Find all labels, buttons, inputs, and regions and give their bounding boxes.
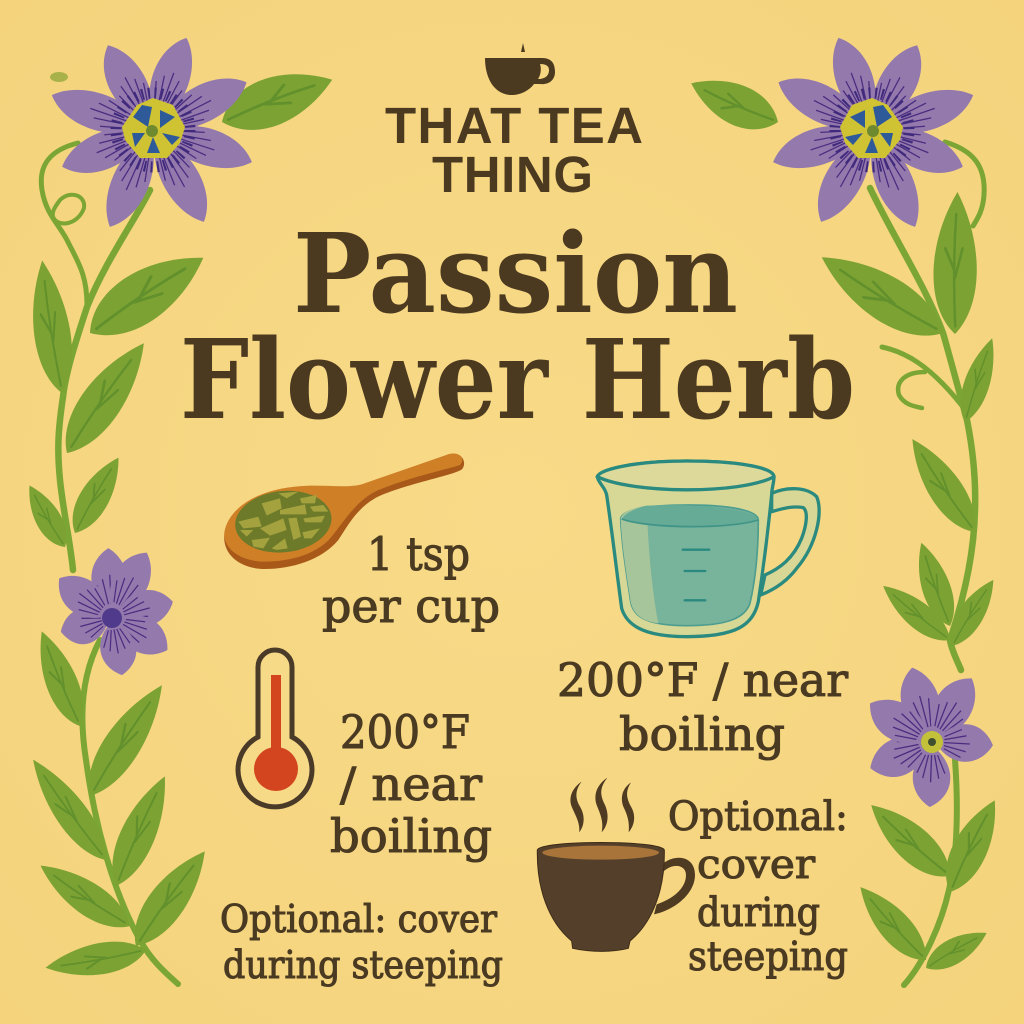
- text: optional right: cover: [697, 842, 816, 888]
- text: optional right: [668, 794, 848, 980]
- text: temperature: 200°F: [340, 705, 470, 759]
- brand name: [385, 97, 643, 203]
- left vine: [18, 56, 340, 984]
- text: optional right: Optional:: [668, 794, 848, 840]
- icon: spoon with herbs: [224, 454, 464, 569]
- text: optional right: during: [697, 890, 820, 936]
- left leaves: [18, 56, 340, 984]
- text: temperature: boiling: [330, 809, 492, 863]
- text: temperature: [330, 705, 492, 863]
- text: temperature: / near: [340, 757, 482, 811]
- text: amount: per cup: [322, 579, 500, 633]
- text: amount: 1 tsp: [367, 527, 470, 581]
- text: water temperature: [557, 653, 848, 761]
- lower left stem: [82, 640, 178, 984]
- text: optional left: Optional: cover: [220, 897, 498, 941]
- text: water temperature: boiling: [619, 707, 785, 761]
- flower: top right: [767, 31, 979, 235]
- icon: logo cup: [485, 43, 555, 95]
- text: optional left: [220, 897, 503, 987]
- text: amount: [322, 527, 500, 633]
- brand name: THING: [432, 146, 593, 203]
- brand name: THAT TEA: [385, 97, 643, 154]
- icon: steaming cup: [537, 778, 695, 951]
- right leaves: [683, 66, 1009, 978]
- small dot: [50, 72, 68, 82]
- flower: top left: [46, 31, 258, 235]
- text: optional right: steeping: [688, 934, 848, 980]
- text: optional left: during steeping: [223, 943, 503, 987]
- title: Flower Herb: [180, 315, 855, 444]
- title: [180, 209, 855, 444]
- upper left stem: [41, 143, 150, 570]
- title: Passion: [293, 209, 738, 338]
- logo: [385, 43, 643, 203]
- icon: thermometer: [238, 650, 312, 807]
- right vine: [683, 66, 1009, 985]
- text: water temperature: 200°F / near: [557, 653, 848, 707]
- right stems: [870, 142, 984, 985]
- icon: measuring cup: [597, 461, 819, 637]
- flower: small left: [48, 544, 177, 678]
- flower: small right: [860, 663, 994, 808]
